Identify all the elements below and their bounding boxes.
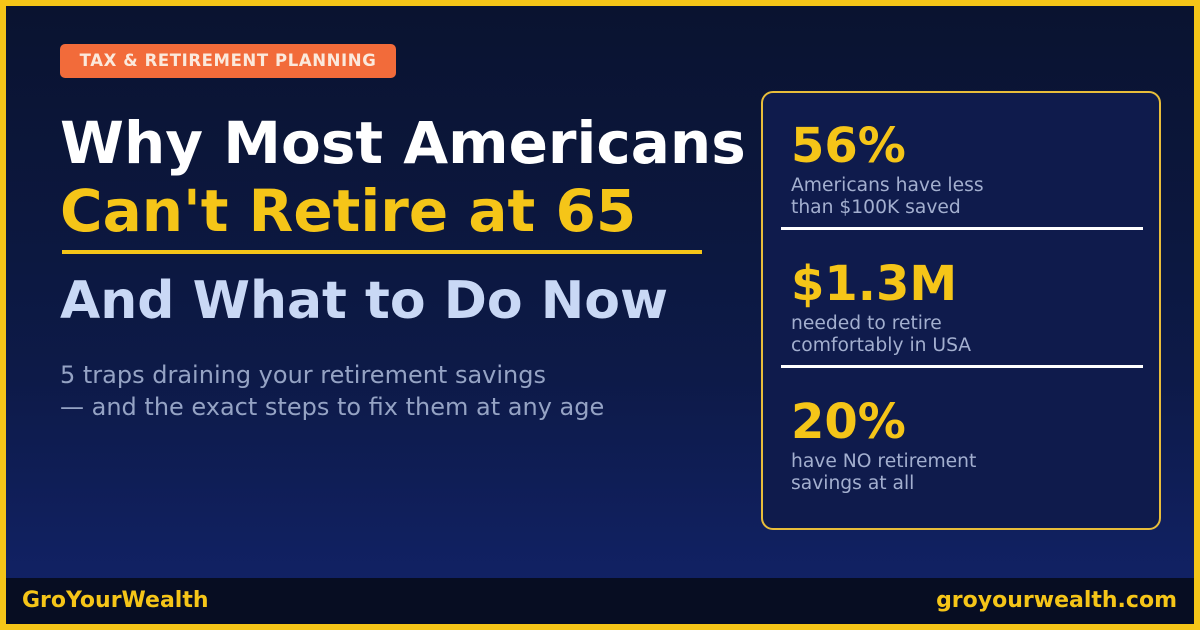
stat: $1.3M: $1.3M	[791, 256, 957, 312]
stat: 56%: 56%	[791, 118, 906, 174]
stat: 20%: have NO retirement	[791, 451, 976, 472]
panel: stats	[761, 91, 1161, 530]
title	[60, 109, 746, 245]
description: — and the exact steps to fix them at any age	[60, 393, 604, 421]
description: 5 traps draining your retirement savings	[60, 361, 546, 389]
footer bar	[6, 578, 1194, 624]
tag badge	[60, 44, 396, 78]
title underline	[62, 250, 702, 254]
brand name: GroYourWealth	[22, 588, 209, 613]
tag badge: TAX & RETIREMENT PLANNING	[80, 51, 376, 70]
stat: $1.3M: needed to retire	[791, 313, 942, 334]
stat: $1.3M	[791, 256, 971, 356]
subheading: And What to Do Now	[60, 271, 668, 331]
stat: 56%	[791, 118, 984, 218]
stat: 20%: 20%	[791, 394, 906, 450]
website: groyourwealth.com	[936, 588, 1177, 613]
stat: 56%: than $100K saved	[791, 197, 961, 218]
stat: 20%: savings at all	[791, 473, 914, 494]
title: Why Most Americans	[60, 109, 746, 177]
stat: $1.3M: comfortably in USA	[791, 335, 971, 356]
stat: 20%	[791, 394, 976, 494]
stat: 56%: Americans have less	[791, 175, 984, 196]
title: Can't Retire at 65	[60, 177, 636, 245]
description	[60, 361, 604, 421]
